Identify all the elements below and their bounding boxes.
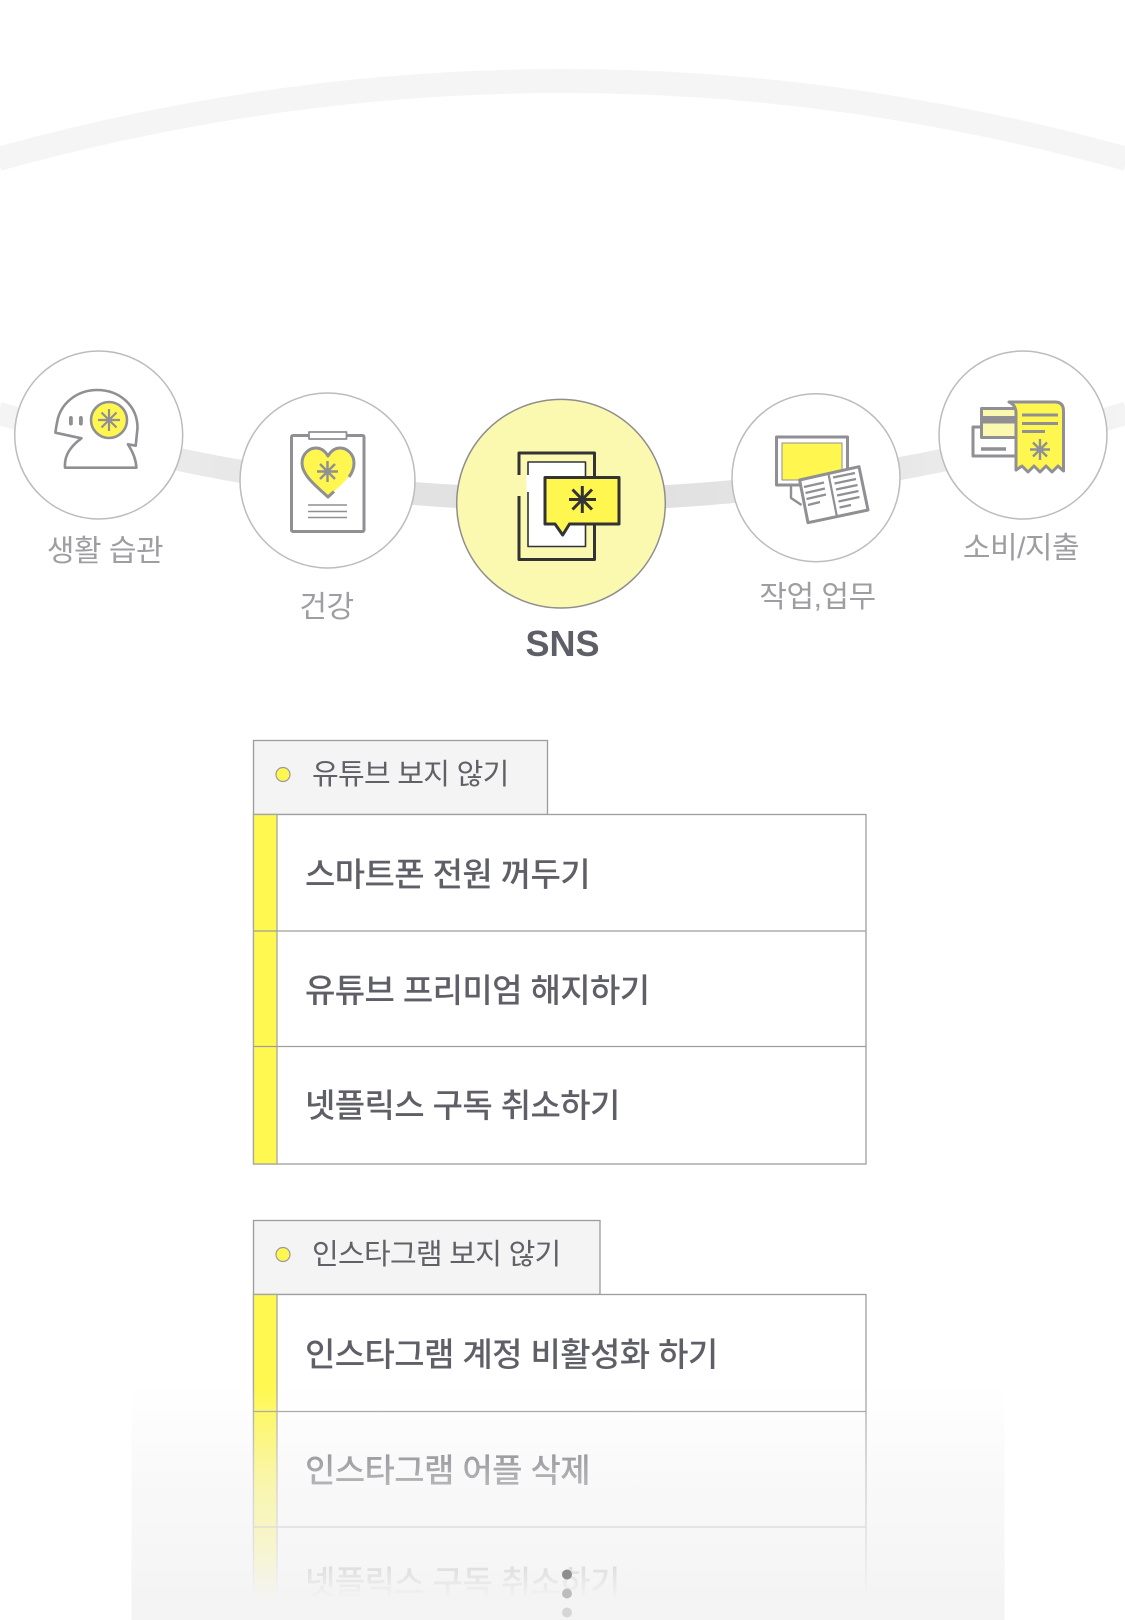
icon: head with asterisk bbox=[55, 390, 138, 468]
row text: 유튜브 프리미엄 해지하기 bbox=[305, 972, 650, 1009]
category: lifestyle habits bbox=[15, 351, 183, 568]
category: SNS (selected) bbox=[457, 399, 665, 664]
panel: stop watching YouTube bbox=[253, 740, 866, 1164]
tab: stop watching Instagram: 인스타그램 보지 않기 bbox=[312, 1239, 561, 1271]
category: health bbox=[240, 393, 415, 624]
icon: phone with speech bubble bbox=[519, 453, 619, 560]
tab: stop watching YouTube: 유튜브 보지 않기 bbox=[312, 759, 509, 791]
tab: stop watching Instagram bbox=[254, 1220, 600, 1294]
icon: cards and receipt bbox=[973, 402, 1064, 472]
row text: 넷플릭스 구독 취소하기 bbox=[305, 1087, 620, 1124]
more indicator dots bbox=[562, 1570, 572, 1618]
icon: monitor and open book bbox=[776, 437, 868, 523]
icon: clipboard with heart bbox=[292, 432, 364, 532]
list: YouTube actions bbox=[253, 814, 866, 1164]
label: spending: 소비/지출 bbox=[963, 532, 1079, 565]
label: lifestyle habits: 생활 습관 bbox=[47, 535, 163, 568]
row text: 인스타그램 어플 삭제 bbox=[305, 1452, 590, 1489]
category: spending bbox=[939, 351, 1107, 565]
top arc bbox=[0, 81, 1125, 159]
bottom arc connecting the circles bbox=[0, 413, 1125, 500]
row text: 넷플릭스 구독 취소하기 bbox=[305, 1564, 620, 1601]
tab: stop watching YouTube bbox=[254, 740, 548, 814]
list: Instagram actions bbox=[253, 1294, 866, 1620]
row text: 인스타그램 계정 비활성화 하기 bbox=[305, 1336, 718, 1373]
panel: stop watching Instagram bbox=[253, 1220, 866, 1620]
fade overlay bbox=[132, 1385, 1004, 1620]
label: work: 작업,업무 bbox=[759, 581, 876, 614]
label: health: 건강 bbox=[299, 591, 354, 624]
row text: 스마트폰 전원 꺼두기 bbox=[305, 856, 590, 893]
label: SNS: SNS bbox=[525, 623, 600, 664]
category: work bbox=[732, 394, 900, 614]
